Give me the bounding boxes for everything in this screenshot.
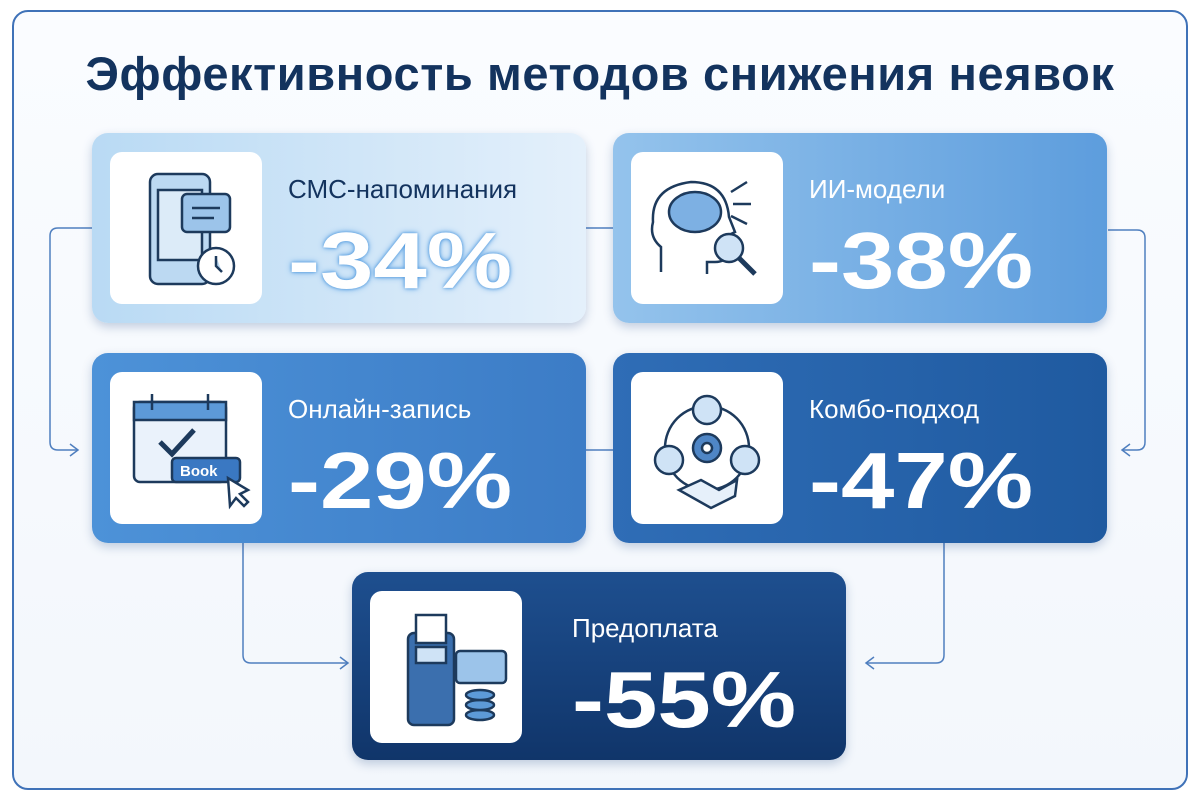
icon: brain head: [631, 152, 783, 304]
icon: payment terminal: [370, 591, 522, 743]
label: Комбо-подход: [809, 394, 979, 424]
panel: SMS: [92, 133, 586, 323]
panel: online: [92, 353, 586, 543]
icon: calendar book: Book: [180, 463, 218, 480]
panel: combo: [613, 353, 1107, 543]
icon: calendar book: [110, 372, 262, 524]
value: -29%: [288, 436, 512, 525]
label: СМС-напоминания: [288, 174, 517, 204]
icon: combo: [631, 372, 783, 524]
label: ИИ-модели: [809, 174, 945, 204]
value: -47%: [809, 436, 1033, 525]
panel: prepay: [352, 572, 846, 760]
icon: phone with message and clock: [110, 152, 262, 304]
value: -38%: [809, 216, 1033, 305]
value: -34%: [288, 216, 512, 305]
label: Предоплата: [572, 613, 718, 643]
label: Онлайн-запись: [288, 394, 471, 424]
panel: AI: [613, 133, 1107, 323]
title: Эффективность методов снижения неявок: [85, 47, 1115, 100]
value: -55%: [572, 655, 796, 744]
